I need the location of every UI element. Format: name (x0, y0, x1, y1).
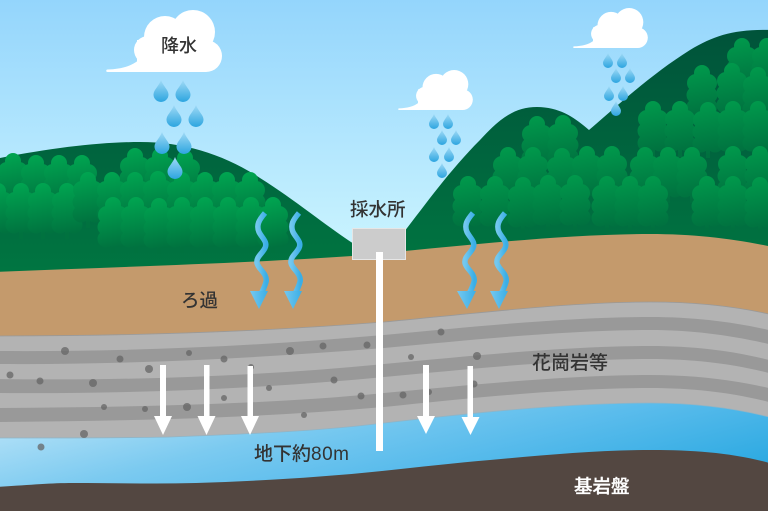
rain drops under middle cloud (429, 114, 461, 178)
groundwater layer (0, 403, 768, 500)
label: well: 採水所 (350, 199, 406, 220)
gravel dots (6, 328, 481, 450)
right cloud (573, 8, 648, 48)
well pipe (376, 252, 383, 451)
label: granite: 花崗岩等 (532, 352, 608, 374)
middle cloud (398, 70, 473, 110)
large cloud with label (106, 10, 222, 72)
wavy infiltration arrow 2 (284, 213, 302, 309)
wavy infiltration arrow 4 (490, 213, 508, 309)
label: bedrock: 基岩盤 (574, 476, 630, 497)
label: filtration: ろ過 (181, 290, 218, 311)
white arrow 5 (462, 366, 480, 435)
label: depth: 地下約80m (254, 443, 349, 465)
sky background (0, 0, 768, 260)
wavy infiltration arrow 1 (250, 213, 268, 309)
rock bands (0, 317, 768, 422)
granite rock layer (0, 302, 768, 445)
soil layer (0, 234, 768, 340)
large cloud with label: 降水 (161, 36, 197, 56)
left forested hill (0, 142, 354, 280)
right forested hills (404, 30, 768, 260)
white arrow 3 (241, 366, 259, 435)
rain drops under large cloud (154, 80, 204, 179)
rain drops under right cloud (603, 53, 635, 116)
wavy infiltration arrow 3 (457, 213, 476, 309)
white arrow 4 (417, 365, 435, 434)
white arrow 2 (198, 365, 216, 435)
well facility box (352, 228, 406, 260)
bedrock layer (0, 450, 768, 511)
white arrow 1 (154, 365, 172, 435)
